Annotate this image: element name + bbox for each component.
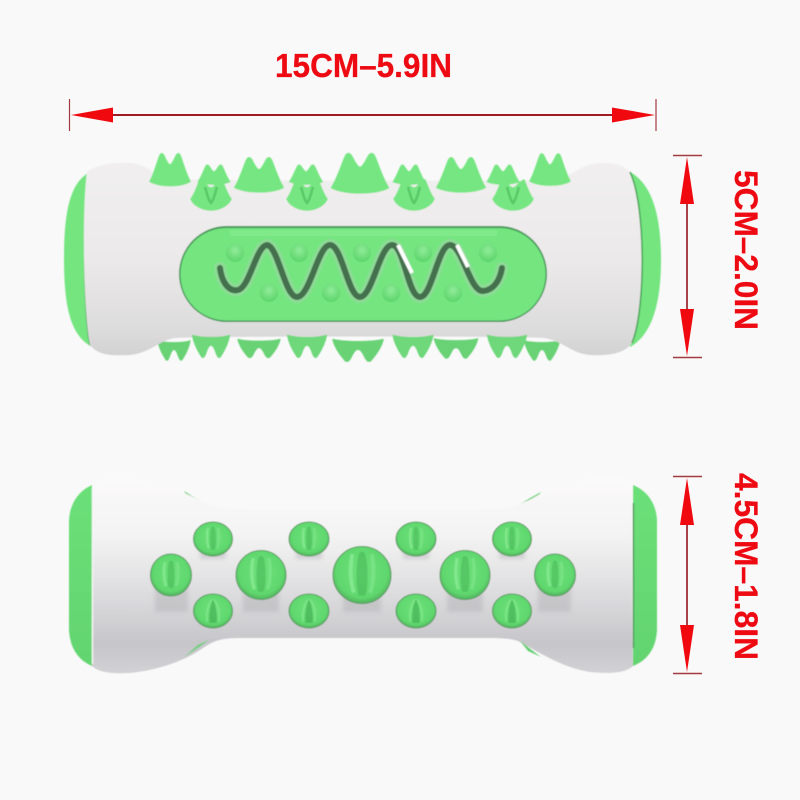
top toy: chew toy side view <box>64 154 661 361</box>
side accents <box>184 491 216 510</box>
label: 5 cm height: 5CM–2.0IN <box>728 170 764 330</box>
left end cap <box>69 485 92 666</box>
left end cap <box>64 171 92 347</box>
toy body <box>92 477 633 673</box>
front spikes <box>191 180 231 210</box>
bump shadows <box>155 550 571 612</box>
right end cap <box>630 172 661 347</box>
front bottom spikes <box>193 335 526 357</box>
center window <box>179 226 547 322</box>
rear bottom spikes <box>158 339 560 361</box>
arrow: length dimension <box>70 99 656 131</box>
arrow: height dimension top <box>673 156 702 358</box>
bottom toy: chew toy top view <box>69 477 657 673</box>
window nubs <box>226 244 497 302</box>
right end cap <box>633 485 657 666</box>
arrow: height dimension bottom <box>673 476 702 674</box>
toy body <box>84 163 642 355</box>
title: length label: 15CM–5.9IN <box>275 47 452 84</box>
zigzag slot <box>220 245 502 297</box>
top crown spikes <box>150 154 570 193</box>
label: 4.5 cm height: 4.5CM–1.8IN <box>728 473 764 660</box>
green bumps <box>150 522 576 628</box>
